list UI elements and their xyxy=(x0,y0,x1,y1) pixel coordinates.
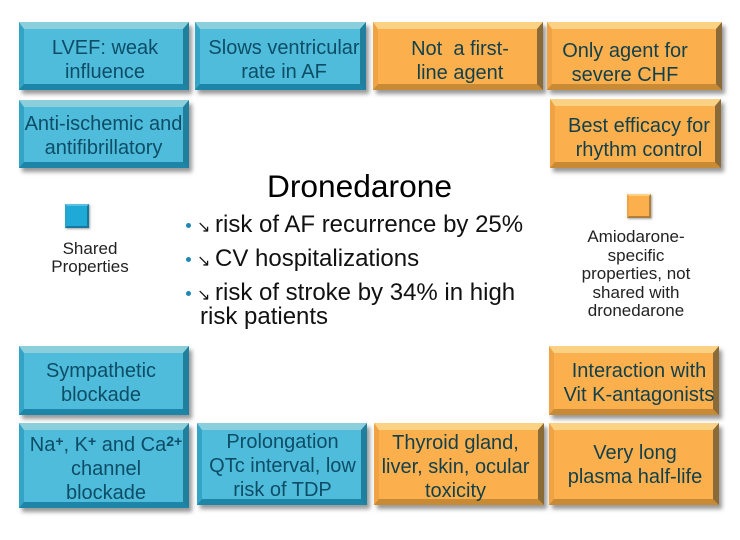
title: Dronedarone xyxy=(267,168,452,204)
bullet: stroke risk xyxy=(186,279,515,330)
panel: not a first-line agent: line agent xyxy=(417,62,503,84)
panel: interaction with Vit K-antagonists: Vit K-antagonists xyxy=(564,384,714,406)
legend label: shared properties: Properties xyxy=(51,257,129,276)
legend label: amiodarone-specific properties: specific xyxy=(608,246,664,264)
panel: thyroid liver skin ocular toxicity xyxy=(374,423,544,505)
bullet: CV hospitalizations: ↘ xyxy=(197,253,210,270)
panel: channel blockade: Na+, K+ and Ca2+ xyxy=(30,433,182,456)
panel: channel blockade: channel xyxy=(71,458,141,480)
bullet: stroke risk: risk patients xyxy=(200,303,328,330)
legend label: amiodarone-specific properties xyxy=(582,227,690,320)
panel: anti-ischemic and antifibrillatory: Anti-ischemic and xyxy=(25,113,182,135)
bullet: stroke risk: ↘ xyxy=(197,287,210,304)
panel: only agent for severe CHF: Only agent for xyxy=(562,40,688,62)
panel: channel blockade xyxy=(19,423,189,508)
panel: prolongation QTc interval: risk of TDP xyxy=(233,479,332,501)
legend icon: shared xyxy=(65,204,89,228)
panel: best efficacy for rhythm control: Best efficacy for xyxy=(568,115,710,137)
panel: best efficacy for rhythm control xyxy=(550,99,721,168)
panel: thyroid liver skin ocular toxicity: Thyroid gland, xyxy=(392,432,519,454)
legend label: amiodarone-specific properties: dronedarone xyxy=(588,301,684,320)
panel: only agent for severe CHF: severe CHF xyxy=(572,64,678,86)
panel: not a first-line agent: Not a first- xyxy=(411,38,509,60)
panel: thyroid liver skin ocular toxicity: liver, skin, ocular xyxy=(382,456,529,478)
panel: best efficacy for rhythm control: rhythm control xyxy=(576,139,702,161)
panel: slows ventricular rate: rate in AF xyxy=(241,61,327,83)
legend label: amiodarone-specific properties: properties, not xyxy=(582,264,690,283)
legend label: amiodarone-specific properties: Amiodarone- xyxy=(587,227,685,246)
panel: prolongation QTc interval: Prolongation xyxy=(226,431,339,453)
legend label: shared properties: Shared xyxy=(63,239,117,258)
panel: channel blockade: blockade xyxy=(66,482,146,504)
bullet: AF recurrence: risk of AF recurrence by 25% xyxy=(215,211,523,238)
bullet list xyxy=(186,211,523,330)
panel: only agent for severe CHF xyxy=(547,22,722,90)
legend label: shared properties xyxy=(51,239,129,276)
bullet: AF recurrence: ↘ xyxy=(197,219,210,236)
panel: slows ventricular rate: Slows ventricular xyxy=(208,37,360,59)
legend icon: amiodarone-specific xyxy=(627,194,651,218)
panel: thyroid liver skin ocular toxicity: toxicity xyxy=(425,480,486,502)
panel: anti-ischemic and antifibrillatory xyxy=(19,100,189,168)
panel: LVEF weak influence: LVEF: weak xyxy=(52,37,158,59)
panel: interaction with Vit K-antagonists xyxy=(549,346,719,415)
panel: prolongation QTc interval: QTc interval, low xyxy=(209,455,356,477)
panel: anti-ischemic and antifibrillatory: antifibrillatory xyxy=(45,137,162,159)
panel: slows ventricular rate xyxy=(195,22,366,90)
panel: sympathetic blockade: Sympathetic xyxy=(46,360,156,382)
panel: very long plasma half-life xyxy=(549,423,719,505)
panel: LVEF weak influence: influence xyxy=(65,61,145,83)
panel: not a first-line agent xyxy=(373,22,543,90)
bullet: CV hospitalizations: CV hospitalizations xyxy=(215,245,419,272)
bullet: stroke risk: risk of stroke by 34% in high xyxy=(215,279,515,306)
panel: sympathetic blockade xyxy=(19,346,189,415)
panel: very long plasma half-life: plasma half-life xyxy=(568,466,702,488)
panel: sympathetic blockade: blockade xyxy=(61,384,141,406)
legend label: amiodarone-specific properties: shared with xyxy=(593,282,679,302)
panel: interaction with Vit K-antagonists: Interaction with xyxy=(572,360,706,382)
panel: very long plasma half-life: Very long xyxy=(593,442,677,464)
panel: prolongation QTc interval xyxy=(197,423,367,505)
panel: LVEF weak influence xyxy=(19,22,189,90)
